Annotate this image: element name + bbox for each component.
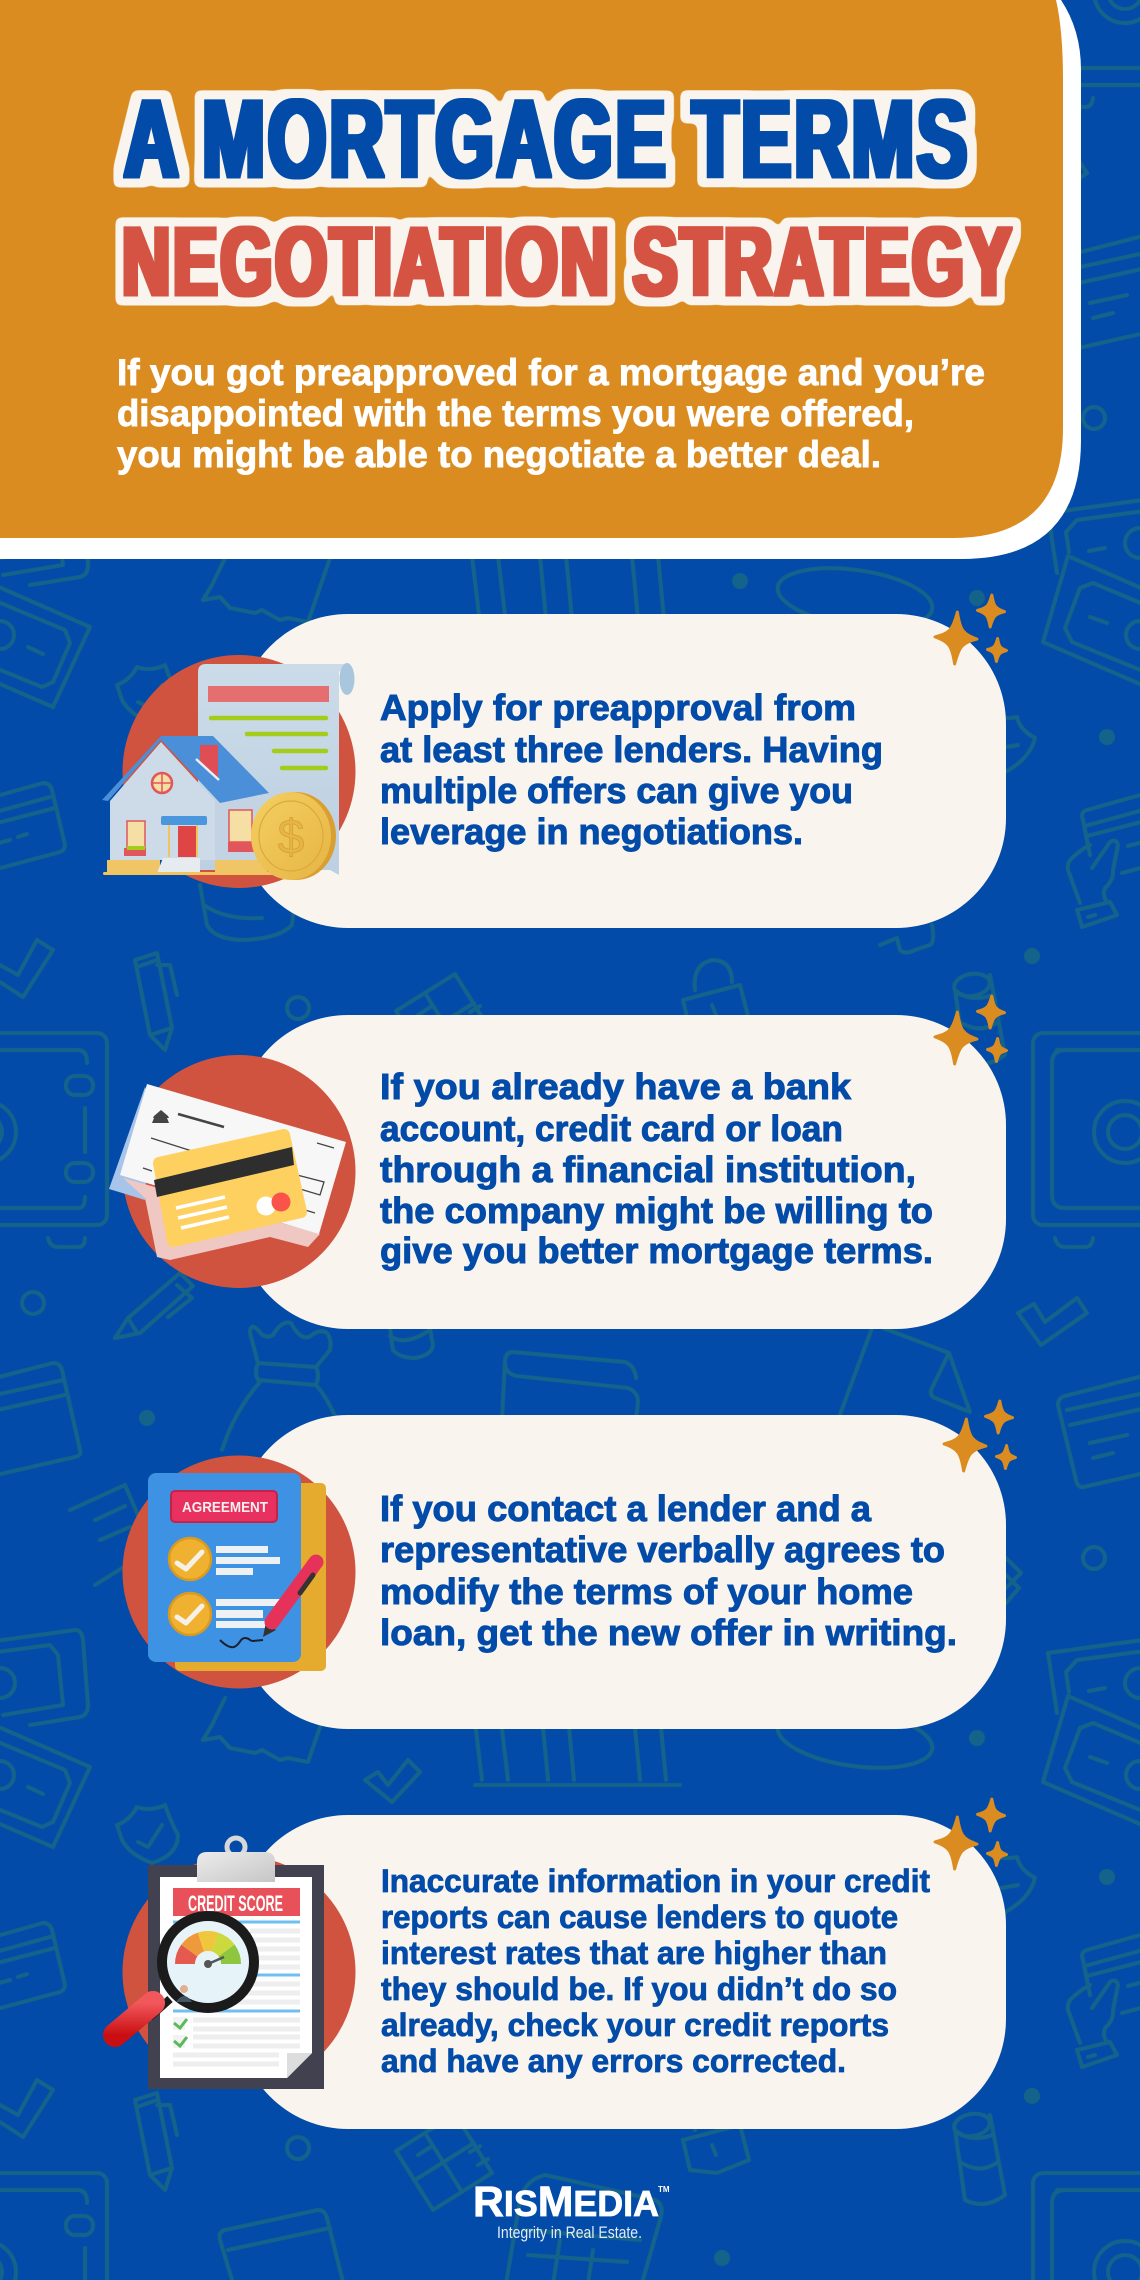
step 3 text: representative verbally agrees to (380, 1529, 945, 1570)
logo: RISMedia: TM (658, 2185, 670, 2194)
icon: credit score clipboard and magnifier: CREDIT SCORE (188, 1891, 283, 1916)
sparkles (934, 1798, 1007, 1870)
header panel (0, 0, 1081, 559)
intro text (117, 352, 985, 475)
icon: cheque and credit card (109, 1084, 346, 1260)
step 2 text: give you better mortgage terms. (380, 1230, 933, 1271)
step 1 text: at least three lenders. Having (380, 729, 883, 770)
step 4 text: reports can cause lenders to quote (381, 1899, 898, 1935)
sparkles (943, 1400, 1016, 1472)
step 4 text: and have any errors corrected. (381, 2043, 846, 2079)
panel: step 1 preapproval (102, 594, 1007, 928)
step 4 text: interest rates that are higher than (381, 1935, 887, 1971)
sparkles (934, 995, 1007, 1065)
panel: step 4 credit reports (115, 1798, 1007, 2129)
step 4 text: Inaccurate information in your credit (381, 1863, 930, 1899)
icon: agreement document and pen (148, 1473, 326, 1671)
step 4 text (381, 1863, 930, 2079)
step 1 text: leverage in negotiations. (380, 811, 803, 852)
intro text: If you got preapproved for a mortgage and you’re (117, 352, 985, 393)
step 2 text (380, 1066, 933, 1271)
step 1 text: Apply for preapproval from (380, 687, 856, 728)
step 4 text: already, check your credit reports (381, 2007, 889, 2043)
icon: credit score clipboard and magnifier (115, 1838, 324, 2089)
sparkles (934, 594, 1007, 665)
red circle (122, 1456, 356, 1688)
icon: house, document and coin (102, 663, 354, 880)
logo: RISMedia: Integrity in Real Estate. (497, 2223, 642, 2242)
step 1 text: multiple offers can give you (380, 770, 853, 811)
step 3 text: If you contact a lender and a (380, 1488, 872, 1529)
red circle (122, 1055, 356, 1288)
intro text: disappointed with the terms you were offered, (117, 393, 914, 434)
step 3 text: modify the terms of your home (380, 1571, 913, 1612)
step 2 text: If you already have a bank (380, 1066, 852, 1107)
step 3 text (380, 1488, 957, 1653)
step 2 text: through a financial institution, (380, 1149, 916, 1190)
step 4 text: they should be. If you didn’t do so (381, 1971, 897, 2007)
red circle (122, 655, 356, 888)
icon: house, document and coin: $ (278, 811, 304, 864)
step 2 text: account, credit card or loan (380, 1108, 843, 1149)
step 2 text: the company might be willing to (380, 1190, 933, 1231)
intro text: you might be able to negotiate a better deal. (117, 434, 881, 475)
panel: step 2 existing relationship (109, 995, 1007, 1329)
icon: agreement document and pen: AGREEMENT (182, 1499, 268, 1516)
step 1 text (380, 687, 883, 852)
logo: RISMedia: RISMEDIA (473, 2178, 659, 2226)
red circle (122, 1856, 356, 2088)
step 3 text: loan, get the new offer in writing. (380, 1612, 957, 1653)
panel: step 3 written offer (122, 1400, 1016, 1729)
